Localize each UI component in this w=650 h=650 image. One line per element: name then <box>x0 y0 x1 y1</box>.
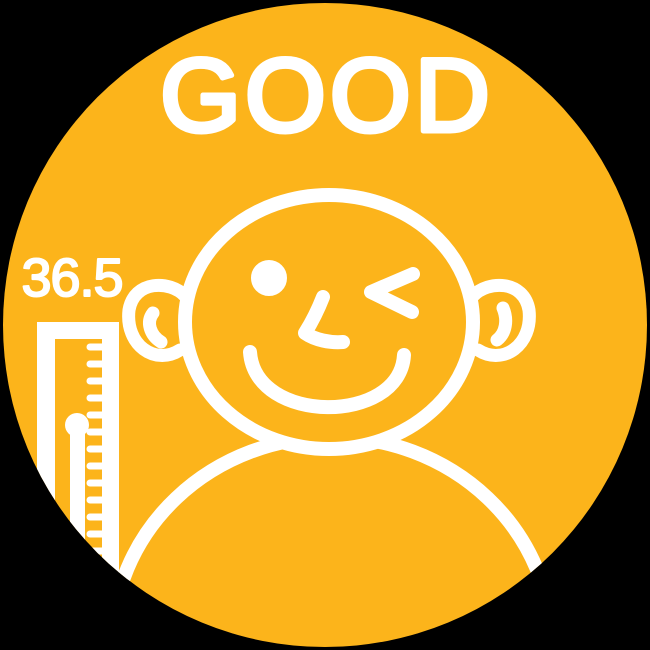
thermometer <box>37 322 119 572</box>
title: GOOD <box>160 38 494 154</box>
body <box>118 440 542 581</box>
head <box>185 195 473 449</box>
temperature label: 36.5 <box>21 248 123 308</box>
face <box>250 266 413 407</box>
ears <box>129 285 529 355</box>
